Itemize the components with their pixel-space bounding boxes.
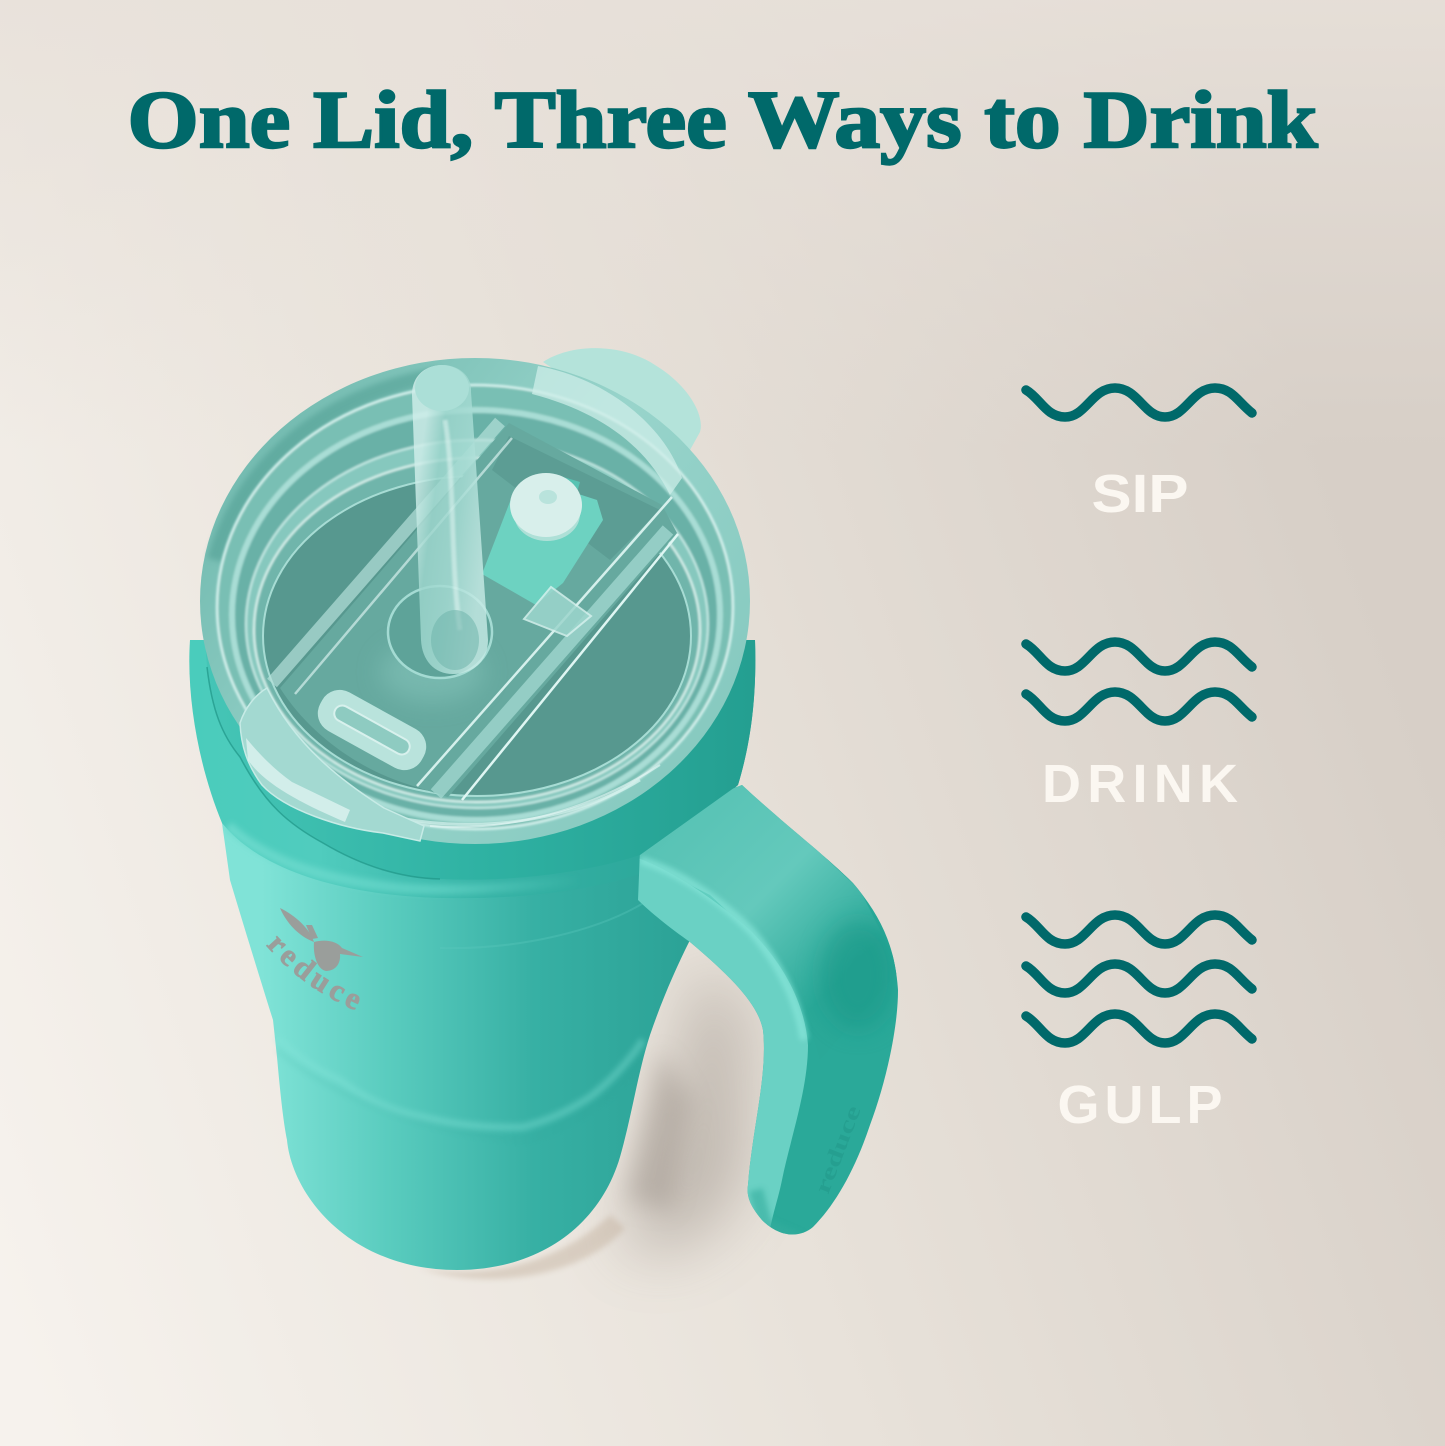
silicone sip tab [482, 473, 603, 605]
cast shadow [620, 960, 745, 1252]
slider channel [272, 422, 678, 800]
lid dark streak [215, 375, 440, 560]
sip label: SIP [1092, 464, 1188, 524]
sip indicator [1026, 388, 1252, 524]
shoulder [189, 640, 755, 898]
sip wave [1026, 388, 1252, 417]
straw [412, 365, 488, 674]
title: One Lid, Three Ways to Drink [128, 74, 1318, 165]
silicone drink stopper [311, 683, 433, 777]
body crease [440, 902, 645, 948]
lid inner well [263, 476, 691, 796]
gulp waves [1026, 915, 1252, 1043]
body [222, 810, 700, 1270]
collar groove [205, 640, 755, 880]
handle tip brand: reduce [809, 1102, 866, 1197]
channel right rails [417, 497, 672, 786]
logo wordmark: reduce [266, 936, 360, 1010]
front lip flap [240, 688, 424, 841]
handle [630, 780, 900, 1240]
handle top face [640, 785, 896, 996]
collar line [207, 667, 440, 879]
slider clear latch [524, 587, 591, 636]
gulp indicator [1026, 915, 1252, 1135]
near body shadow [625, 1050, 690, 1210]
tumbler illustration [189, 348, 898, 1281]
sip plug [514, 487, 580, 541]
drink label: DRINK [1042, 754, 1238, 814]
shoulder highlight [228, 826, 580, 890]
drink waves [1026, 642, 1252, 721]
channel upper dark zone [492, 436, 660, 560]
handle ridge highlight [640, 860, 804, 1040]
logo [266, 908, 362, 1010]
gulp label: GULP [1058, 1075, 1222, 1135]
drink indicator [1026, 642, 1252, 814]
logo bird [314, 941, 363, 971]
lid rings [217, 385, 733, 829]
logo leaves [280, 908, 314, 942]
pull tab disc [543, 348, 701, 450]
handle outer shade [820, 920, 896, 1030]
lid outer shell [200, 358, 750, 844]
handle inner face [630, 858, 808, 1240]
lid [200, 358, 750, 844]
lid bottom glass streaks [320, 780, 640, 824]
lid bright segment near tab [532, 366, 682, 495]
body step ridge [277, 1037, 643, 1127]
straw opening [380, 586, 492, 702]
channel left rail [272, 422, 500, 683]
base shadow [420, 1215, 625, 1279]
